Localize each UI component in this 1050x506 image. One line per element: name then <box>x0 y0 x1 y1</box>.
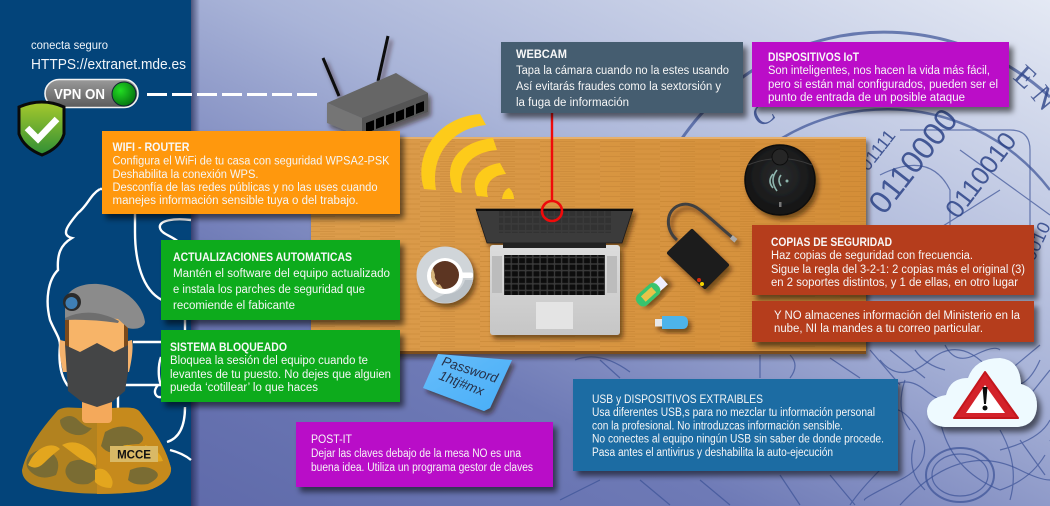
body text: Bloquea la sesión del equipo cuando te <box>170 355 368 367</box>
body text: Usa diferentes USB,s para no mezclar tu información personal <box>592 407 875 419</box>
body text: recomiende el fabicante <box>173 300 295 312</box>
body text: Dejar las claves debajo de la mesa NO es una <box>311 448 522 460</box>
name tag: MCCE <box>117 450 151 462</box>
panel: iot devices <box>752 42 1009 107</box>
body text: nube, NI la mandes a tu correo particular. <box>774 323 983 335</box>
body text <box>173 268 390 312</box>
body text: Desconfía de las redes públicas y no las uses cuando <box>112 182 378 194</box>
body text: buena idea. Utiliza un programa gestor de claves <box>311 462 533 474</box>
extranet address: HTTPS://extranet.mde.es <box>31 56 186 73</box>
uniform <box>22 398 171 494</box>
icon: cloud warning <box>927 358 1037 427</box>
password value: 1htj#mx <box>437 368 487 399</box>
panel: cloud warning note <box>752 301 1034 342</box>
connection text <box>31 40 186 73</box>
cloud network outline <box>48 189 191 460</box>
password text: Password <box>440 354 500 386</box>
conecta seguro label: conecta seguro <box>31 40 108 52</box>
VPN label: VPN ON <box>54 87 105 103</box>
body text: Mantén el software del equipo actualizado <box>173 268 390 280</box>
body text: manejes información sensible tuya o del trabajo. <box>112 195 358 207</box>
body text: Sigue la regla del 3-2-1: 2 copias más el original (3) <box>771 264 1025 276</box>
body text <box>774 310 1021 335</box>
body text: en 2 soportes distintos, y 1 de ellas, en otro lugar <box>771 277 1018 289</box>
desk <box>311 137 866 354</box>
body text: Configura el WiFi de tu casa con seguridad WPSA2-PSK <box>112 156 390 168</box>
face mask <box>65 343 128 407</box>
heading: DISPOSITIVOS IoT <box>768 52 859 64</box>
body text: e instala los parches de seguridad que <box>173 284 365 296</box>
body text: Pasa antes el antivirus y deshabilita la auto-ejecución <box>592 447 833 459</box>
body text: Tapa la cámara cuando no la estes usando <box>516 65 729 77</box>
name tag <box>110 446 158 462</box>
beret badge <box>63 293 81 311</box>
body text <box>592 407 884 459</box>
body text <box>170 355 391 394</box>
heading: WIFI - ROUTER <box>112 142 190 154</box>
VPN switch <box>45 80 138 108</box>
webcam indicator <box>542 113 562 221</box>
dashed connection line <box>147 93 317 96</box>
heading: SISTEMA BLOQUEADO <box>170 342 287 354</box>
background seal: C <box>746 95 781 134</box>
body text: Haz copias de seguridad con frecuencia. <box>771 250 973 262</box>
icon: green USB stick <box>633 275 669 309</box>
body text <box>112 156 390 207</box>
body text: Así evitarás fraudes como la sextorsión y <box>516 81 721 93</box>
background seal: 01111 <box>855 126 900 174</box>
body text: Son inteligentes, nos hacen la vida más fácil, <box>768 65 990 77</box>
icon: blue USB stick <box>655 316 688 329</box>
heading: ACTUALIZACIONES AUTOMATICAS <box>173 252 352 264</box>
icon: laptop <box>476 209 633 335</box>
body text: pueda ‘cotillear’ lo que haces <box>170 382 318 394</box>
background seal: 0110010 <box>939 126 1023 224</box>
body text <box>516 65 729 109</box>
panel: backups <box>752 225 1034 295</box>
sticky note <box>423 354 512 411</box>
beret <box>65 284 145 329</box>
icon: security shield <box>19 102 64 155</box>
icon: coffee cup <box>416 246 474 304</box>
icon: router <box>323 36 428 137</box>
body text: pero si están mal configurados, pueden ser el <box>768 79 998 91</box>
body text: con la profesional. No introduzcas información sensible. <box>592 420 843 432</box>
body text: Y NO almacenes información del Ministerio en la <box>774 310 1021 322</box>
background seal: E <box>1007 59 1043 95</box>
panel: webcam <box>501 42 743 113</box>
body text <box>768 65 998 104</box>
icon: smart device <box>745 145 815 215</box>
panel: post-it <box>296 422 553 487</box>
ears <box>59 340 133 372</box>
body text: la fuga de información <box>516 97 629 109</box>
icon: wifi signal <box>421 114 514 199</box>
face <box>65 318 128 368</box>
icon: external hard drive <box>668 204 737 287</box>
neck <box>82 398 112 423</box>
soldier figure <box>22 284 171 494</box>
body text <box>771 250 1025 289</box>
body text <box>311 448 533 474</box>
status light <box>112 82 136 106</box>
heading: WEBCAM <box>516 49 567 61</box>
panel: automatic updates <box>161 240 400 320</box>
panel: wifi router <box>102 131 400 214</box>
body text: Deshabilita la conexión WPS. <box>112 169 258 181</box>
body text: punto de entrada de un posible ataque <box>768 92 965 104</box>
left blue panel <box>0 0 200 506</box>
body text: No conectes al equipo ningún USB sin saber de donde procede. <box>592 434 884 446</box>
panel: usb devices <box>573 379 898 471</box>
panel: locked system <box>161 330 400 402</box>
heading: POST-IT <box>311 434 352 446</box>
background seal <box>560 32 1050 505</box>
body text: levantes de tu puesto. No dejes que alguien <box>170 369 391 381</box>
heading: COPIAS DE SEGURIDAD <box>771 237 892 249</box>
heading: USB y DISPOSITIVOS EXTRAIBLES <box>592 394 763 406</box>
background seal: 0110000 <box>861 102 965 220</box>
